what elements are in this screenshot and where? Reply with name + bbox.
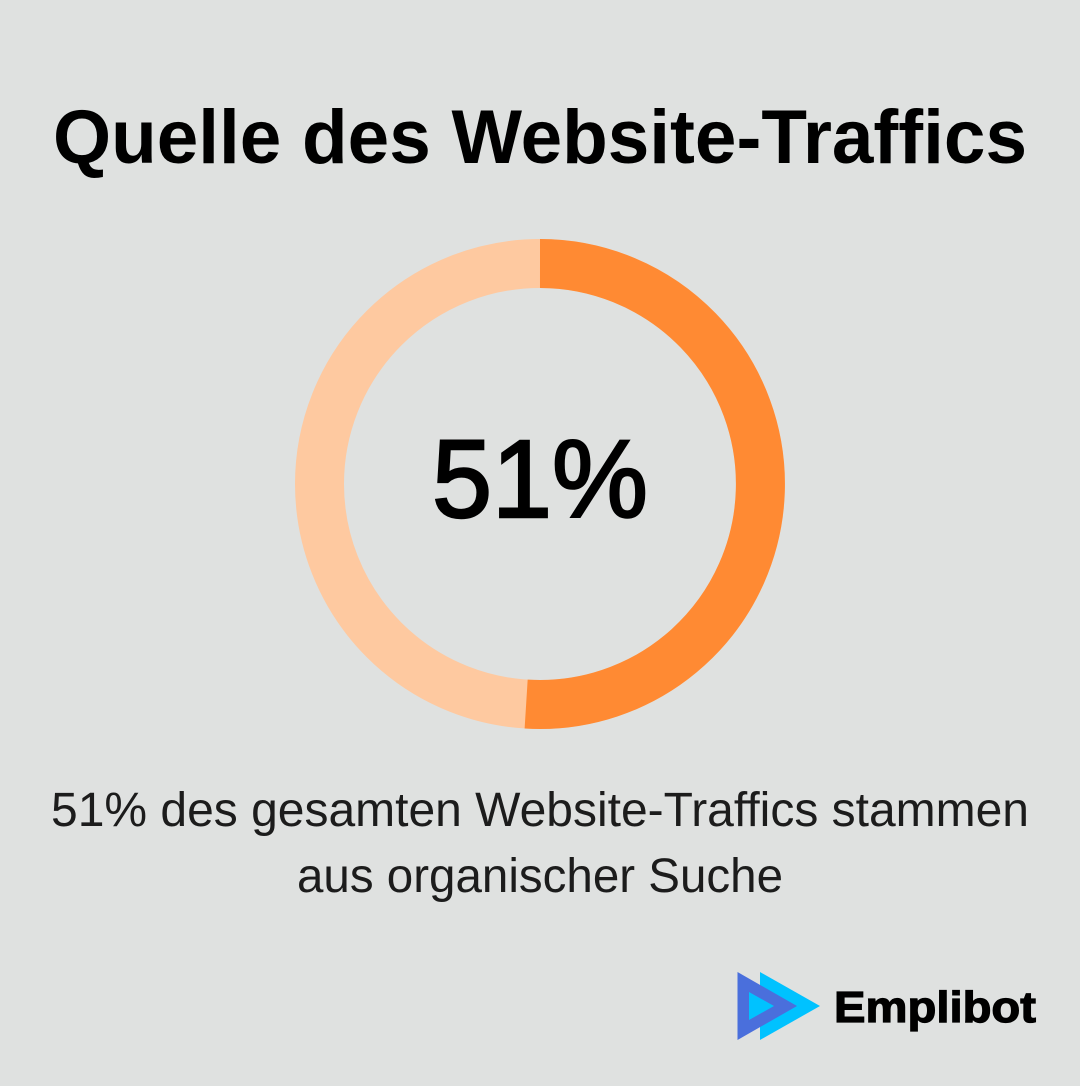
- logo: Emplibot: [738, 972, 1036, 1040]
- title: Quelle des Website-Traffics: [53, 95, 1027, 180]
- donut chart: 51%: [320, 264, 760, 704]
- description text: [51, 784, 1029, 903]
- description text: 51% des gesamten Website-Traffics stammen: [51, 784, 1029, 837]
- logo wordmark: Emplibot: [834, 983, 1036, 1032]
- donut highlighted segment: [526, 264, 760, 704]
- icon: play triangles: [738, 972, 820, 1040]
- description text: aus organischer Suche: [297, 850, 783, 903]
- center percentage: 51%: [432, 418, 648, 541]
- donut remainder segment: [320, 264, 760, 704]
